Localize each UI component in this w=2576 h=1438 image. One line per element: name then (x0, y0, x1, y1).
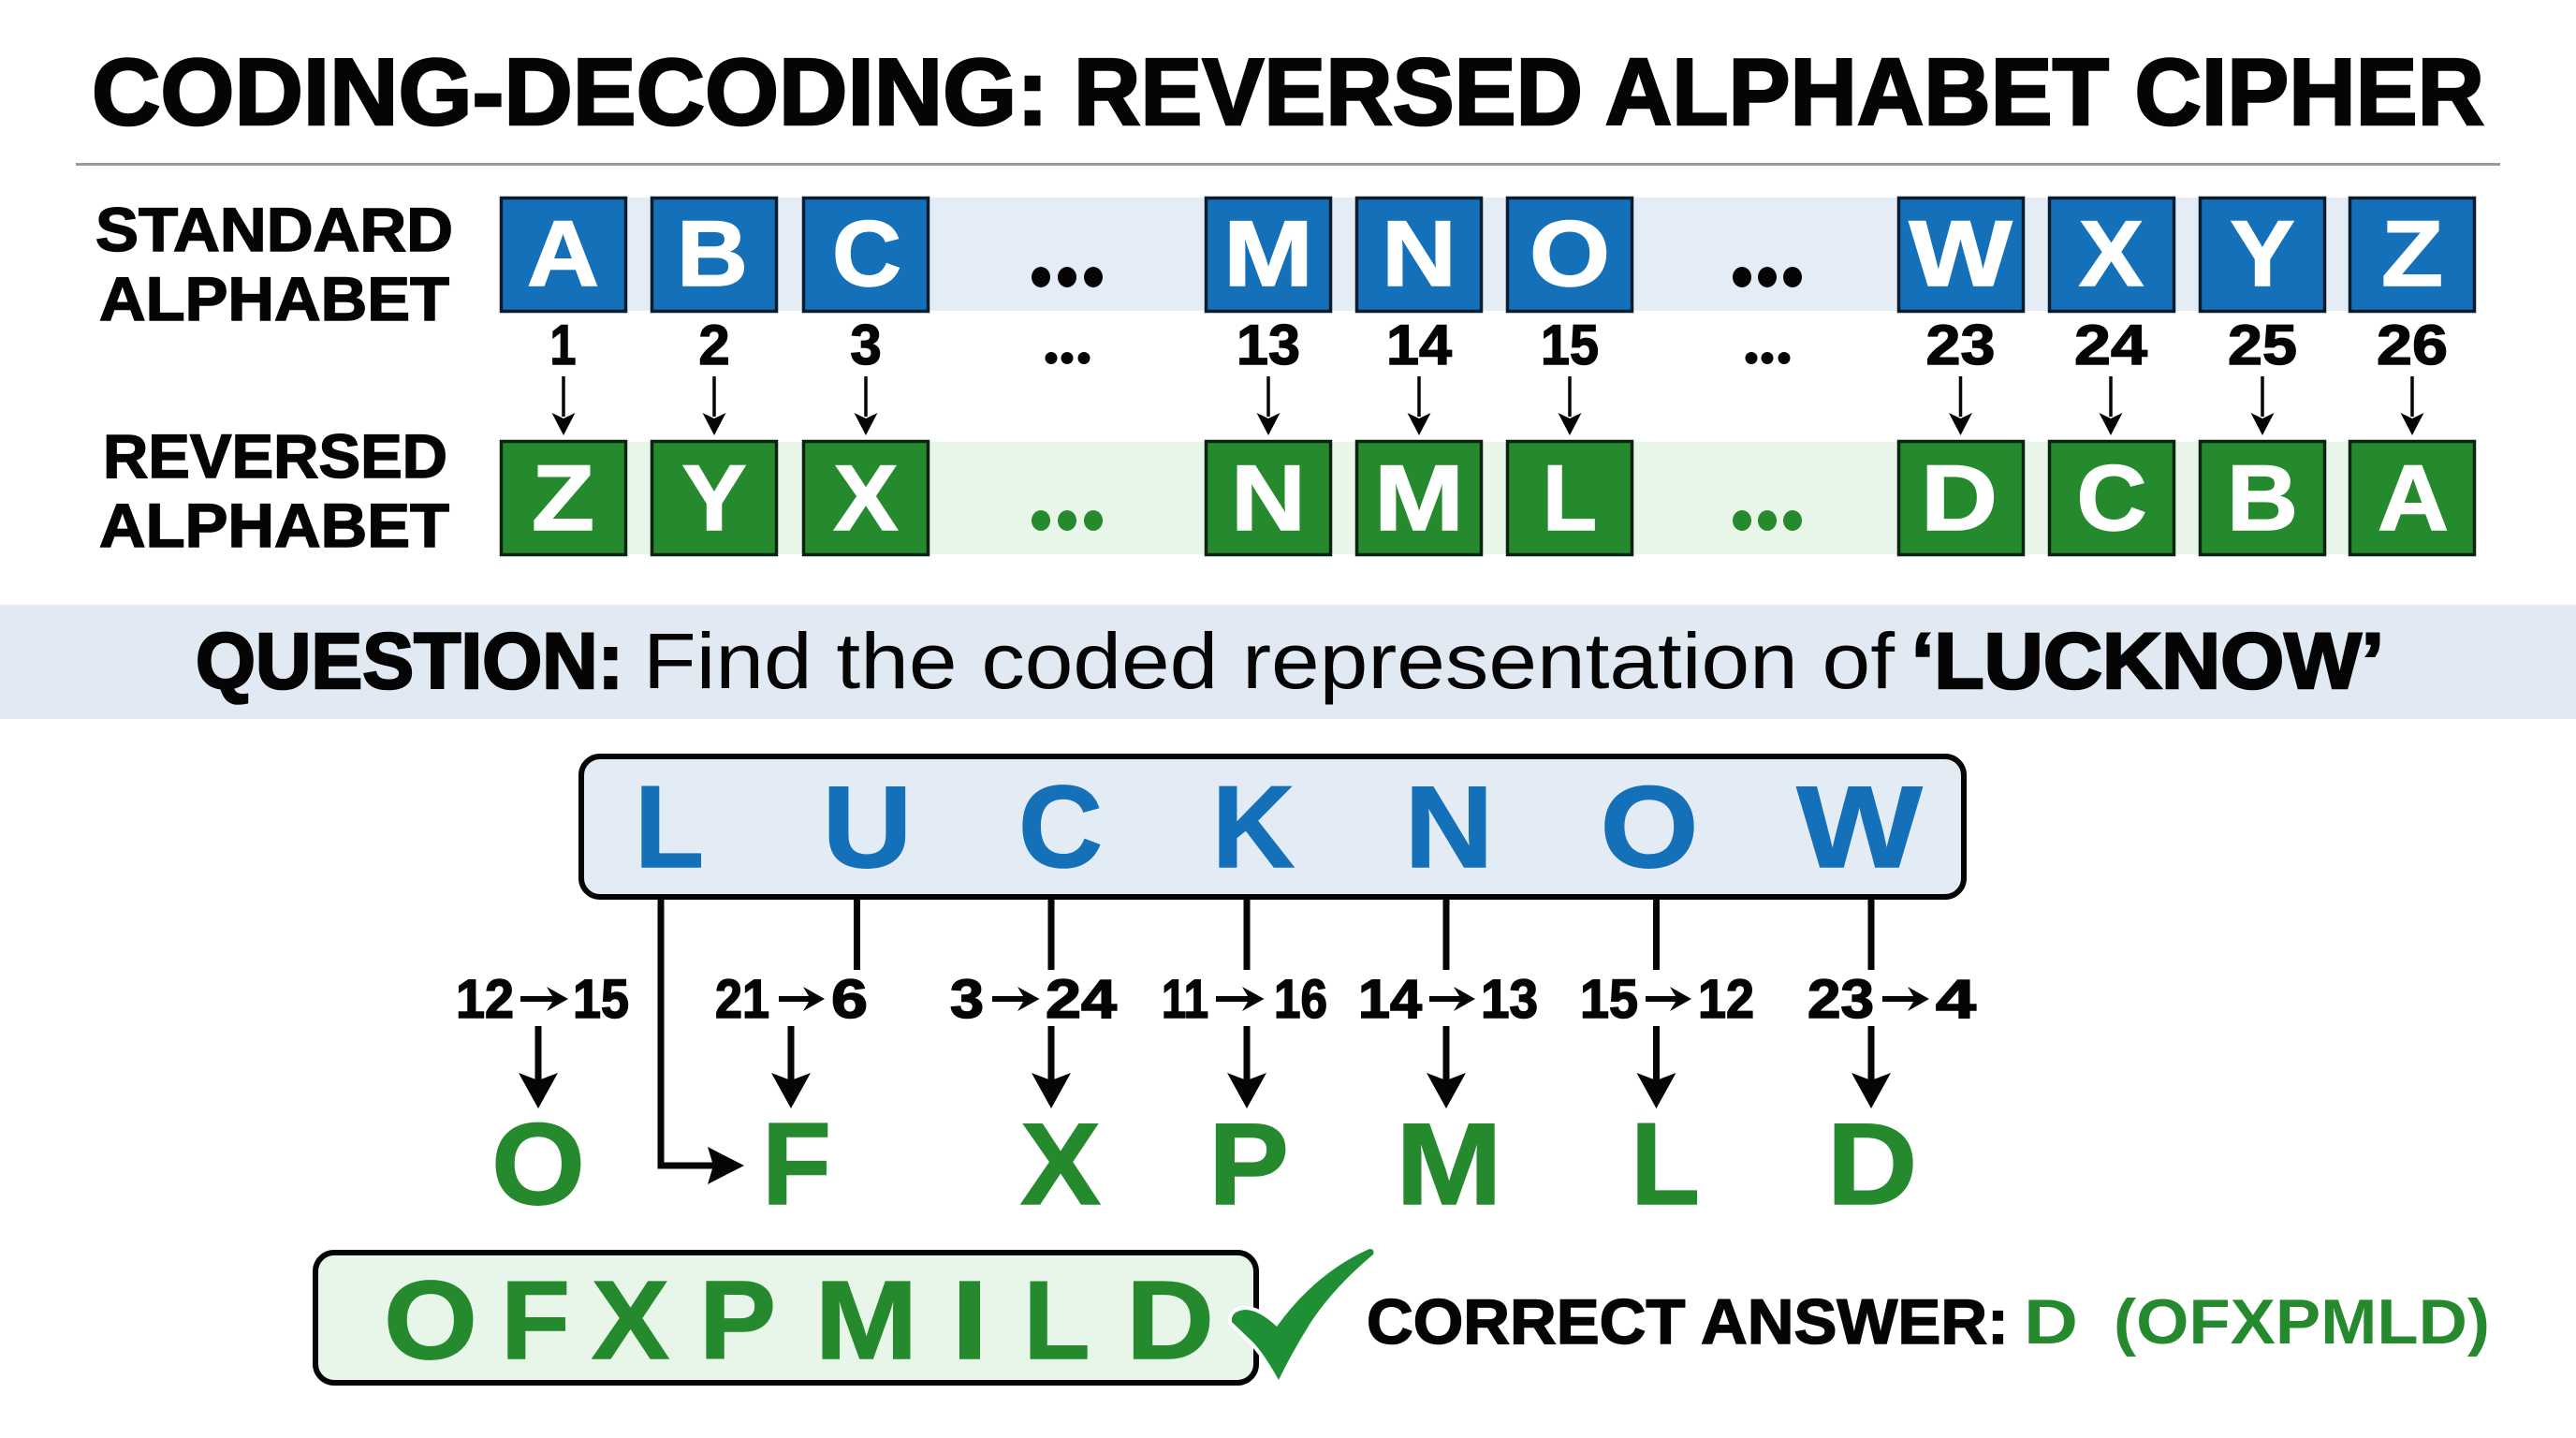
row label: reversed alphabet: REVERSED (103, 421, 447, 491)
mapping: 14 to 13: 13 (1481, 969, 1538, 1030)
mapping: 21 to 6: 6 (831, 969, 868, 1030)
answer box: OFXPMILD: I (951, 1258, 988, 1383)
position numbers: 3 (850, 314, 882, 376)
position numbers: 15 (1541, 314, 1599, 376)
mapping: 15 to 12: 12 (1698, 969, 1754, 1030)
mapping: 11 to 16 (1162, 969, 1327, 1030)
mapping numbers (456, 969, 1976, 1030)
answer box: OFXPMILD: O (384, 1258, 477, 1383)
mapping: 14 to 13: 14 (1358, 969, 1422, 1030)
mapping: 21 to 6 (715, 969, 868, 1030)
ellipsis: standard row (1032, 267, 1802, 287)
coded letters row: F (762, 1100, 831, 1229)
title: REVERSED ALPHABET CIPHER (1074, 40, 2484, 145)
position numbers: 23 (1926, 314, 1996, 376)
panel: question band (0, 605, 2576, 719)
coded letters row: P (1208, 1100, 1289, 1229)
letter boxes: standard alphabet (502, 198, 2475, 311)
mapping: 14 to 13 (1358, 969, 1538, 1030)
position numbers: 26 (2377, 314, 2448, 376)
question text: Find the coded representation of (643, 617, 1895, 705)
elbow arrow: L to F (661, 900, 744, 1184)
word box: LUCKNOW: L (635, 763, 704, 892)
coded letters row: X (1020, 1100, 1101, 1229)
letter boxes: reversed alphabet: Z (532, 446, 594, 550)
position numbers (550, 314, 2448, 376)
arrows: numbers to coded letters (519, 1026, 1891, 1108)
letter boxes: standard alphabet: N (1382, 201, 1456, 305)
word box: LUCKNOW: K (1212, 763, 1295, 892)
mapping: 12 to 15: 12 (456, 969, 514, 1030)
coded letters row: L (1631, 1100, 1700, 1229)
letter boxes: standard alphabet: X (2079, 201, 2144, 305)
coded letters row (491, 1100, 1917, 1229)
letter boxes: reversed alphabet (502, 442, 2475, 554)
question text (196, 617, 2384, 705)
letter boxes: standard alphabet: Y (2230, 201, 2295, 305)
position numbers: 25 (2228, 314, 2297, 376)
icon: check mark (1232, 1249, 1374, 1380)
word box: LUCKNOW: C (1018, 763, 1103, 892)
letter boxes: standard alphabet: W (1910, 201, 2012, 305)
correct answer text: (OFXPMLD) (2114, 1286, 2490, 1357)
correct answer text: CORRECT ANSWER: (1367, 1286, 2009, 1357)
letter boxes: reversed alphabet: N (1231, 446, 1306, 550)
row label: reversed alphabet (99, 421, 449, 560)
coded letters row: M (1396, 1100, 1502, 1229)
word box: LUCKNOW: U (822, 763, 912, 892)
letter boxes: reversed alphabet: D (1921, 446, 1998, 550)
title: CODING-DECODING: (92, 40, 1048, 145)
word box: LUCKNOW (581, 756, 1964, 897)
mapping: 3 to 24: 3 (950, 969, 984, 1030)
answer box: OFXPMILD: P (699, 1258, 776, 1383)
mapping: 21 to 6: 21 (715, 969, 769, 1030)
letter boxes: reversed alphabet: A (2378, 446, 2449, 550)
letter boxes: standard alphabet: B (677, 201, 748, 305)
mapping: 11 to 16: 11 (1162, 969, 1208, 1030)
mapping: 3 to 24: 24 (1046, 969, 1117, 1030)
arrows: standard to reversed (552, 376, 2424, 435)
letter boxes: reversed alphabet: M (1374, 446, 1464, 550)
letter boxes: standard alphabet: C (832, 201, 901, 305)
row label: standard alphabet (95, 195, 453, 333)
letter boxes: reversed alphabet: X (833, 446, 899, 550)
answer box: OFXPMILD: F (501, 1258, 570, 1383)
answer box: OFXPMILD (315, 1253, 1256, 1383)
mapping: 23 to 4: 23 (1808, 969, 1874, 1030)
row label: reversed alphabet: ALPHABET (99, 491, 449, 560)
mapping: 11 to 16: 16 (1274, 969, 1327, 1030)
word box: LUCKNOW: O (1601, 763, 1698, 892)
position numbers: 13 (1237, 314, 1300, 376)
mapping: 15 to 12: 15 (1580, 969, 1638, 1030)
letter boxes: standard alphabet: M (1223, 201, 1313, 305)
mapping: 12 to 15 (456, 969, 629, 1030)
answer box: OFXPMILD: X (592, 1258, 669, 1383)
position numbers: 14 (1386, 314, 1453, 376)
letter boxes: standard alphabet: Z (2381, 201, 2443, 305)
title (92, 40, 2484, 145)
mapping: 23 to 4 (1808, 969, 1976, 1030)
mapping: 3 to 24 (950, 969, 1117, 1030)
word box: LUCKNOW: N (1404, 763, 1494, 892)
word box: LUCKNOW: W (1797, 763, 1923, 892)
position numbers: 2 (698, 314, 730, 376)
mapping: 23 to 4: 4 (1936, 969, 1976, 1030)
connector lines from word box (857, 900, 1871, 970)
letter boxes: reversed alphabet: B (2227, 446, 2298, 550)
mapping: 15 to 12 (1580, 969, 1754, 1030)
row label: standard alphabet: STANDARD (95, 195, 453, 264)
coded letters row: D (1827, 1100, 1917, 1229)
panel: standard alphabet row (95, 195, 2475, 333)
row label: standard alphabet: ALPHABET (99, 264, 449, 333)
mapping: 12 to 15: 15 (573, 969, 629, 1030)
letter boxes: reversed alphabet: Y (681, 446, 747, 550)
answer box: OFXPMILD: M (814, 1258, 917, 1383)
letter boxes: reversed alphabet: L (1543, 446, 1597, 550)
position numbers: 1 (550, 314, 577, 376)
ellipsis: reversed row (1032, 510, 1802, 531)
background band: reversed row (625, 442, 2475, 554)
answer box: OFXPMILD: L (1024, 1258, 1090, 1383)
letter boxes: standard alphabet: O (1530, 201, 1610, 305)
question text: ‘LUCKNOW’ (1911, 617, 2384, 705)
coded letters row: O (491, 1100, 585, 1229)
answer box: OFXPMILD: D (1126, 1258, 1214, 1383)
letter boxes: reversed alphabet: C (2076, 446, 2147, 550)
position numbers: 24 (2074, 314, 2148, 376)
correct answer text (1367, 1286, 2490, 1357)
question text: QUESTION: (196, 617, 623, 705)
letter boxes: standard alphabet: A (527, 201, 599, 305)
panel: reversed alphabet row (99, 421, 2475, 560)
correct answer text: D (2024, 1286, 2078, 1357)
background band: standard row (625, 198, 2475, 311)
